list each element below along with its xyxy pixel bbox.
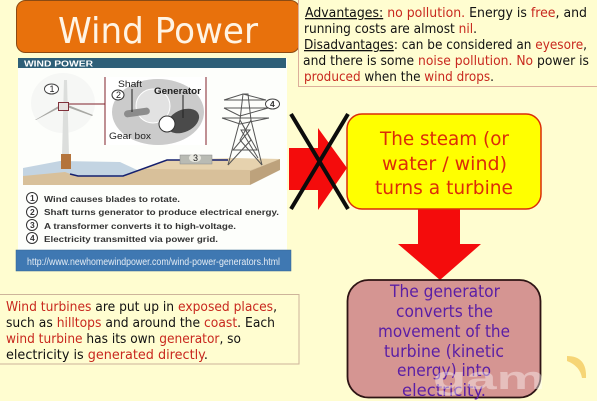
illustration: sea and land [23, 158, 280, 185]
text block: advantages and disadvantages [298, 0, 597, 86]
text block: advantages and disadvantages: produced when the wind drops. [304, 70, 494, 85]
panel: generator step: movement of the [378, 322, 510, 342]
panel: generator step: energy) into [397, 361, 491, 381]
illustration: generator inset: Gear box [109, 131, 152, 141]
text block: wind turbine siting: wind turbine has its own generator, so [6, 332, 241, 347]
illustration: generator inset: Shaft [118, 79, 143, 89]
illustration: transformer [180, 153, 212, 164]
illustration: generator inset: 2 [116, 90, 121, 100]
text block: wind turbine siting [0, 294, 299, 364]
panel: turbine step [347, 114, 541, 209]
text block: advantages and disadvantages: Disadvantages: can be considered an eyesore, [304, 38, 587, 53]
text block: wind turbine siting: such as hilltops and around the coast. Each [6, 316, 275, 331]
text block: wind turbine siting: Wind turbines are put up in exposed places, [6, 300, 277, 315]
numbered legend: 3 [30, 220, 35, 230]
diagram header bar: WIND POWER [24, 60, 93, 68]
title banner: Wind Power [58, 11, 258, 52]
text block: wind turbine siting: electricity is generated directly. [6, 348, 208, 363]
illustration: transformer: 3 [193, 153, 198, 163]
illustration: pylon [222, 94, 280, 165]
url bar [16, 250, 291, 271]
text block: advantages and disadvantages: Advantages: no pollution. Energy is free, and [305, 6, 587, 21]
arrow: crossed-out red right arrow [289, 114, 348, 210]
text block: advantages and disadvantages: and there is some noise pollution. No power is [303, 54, 589, 69]
diagram header bar [18, 58, 286, 68]
watermark: gam [433, 360, 545, 396]
numbered legend: A transformer converts it to high-voltage. [44, 221, 236, 231]
illustration: generator inset: Generator [154, 86, 202, 96]
numbered legend: 2 [30, 207, 35, 217]
numbered legend [26, 192, 279, 244]
panel: generator step: turbine (kinetic [384, 342, 504, 362]
numbered legend: Shaft turns generator to produce electrical energy. [44, 207, 279, 217]
numbered legend: 4 [30, 233, 35, 243]
panel: turbine step: turns a turbine [375, 177, 513, 199]
panel: generator step: converts the [396, 302, 493, 322]
panel: generator step: electricity. [402, 381, 486, 401]
illustration: wind turbine: 1 [50, 84, 55, 94]
title banner [16, 0, 300, 52]
text block: advantages and disadvantages: running costs are almost nil. [304, 22, 477, 37]
arrow: red down arrow [398, 208, 481, 280]
panel: generator step [348, 280, 540, 401]
panel: wind power diagram [18, 58, 287, 251]
illustration: generator inset [105, 77, 207, 145]
panel: turbine step: The steam (or [379, 128, 509, 150]
url bar: http://www.newhomewindpower.com/wind-power-generators.html [27, 257, 280, 268]
numbered legend: Electricity transmitted via power grid. [44, 234, 218, 244]
numbered legend: Wind causes blades to rotate. [44, 194, 180, 204]
illustration: pylon: 4 [270, 99, 275, 109]
numbered legend: 1 [30, 193, 35, 203]
panel: turbine step: water / wind) [382, 153, 507, 175]
panel: generator step: The generator [389, 282, 500, 302]
watermark [433, 356, 586, 396]
illustration: wind turbine [31, 73, 105, 169]
